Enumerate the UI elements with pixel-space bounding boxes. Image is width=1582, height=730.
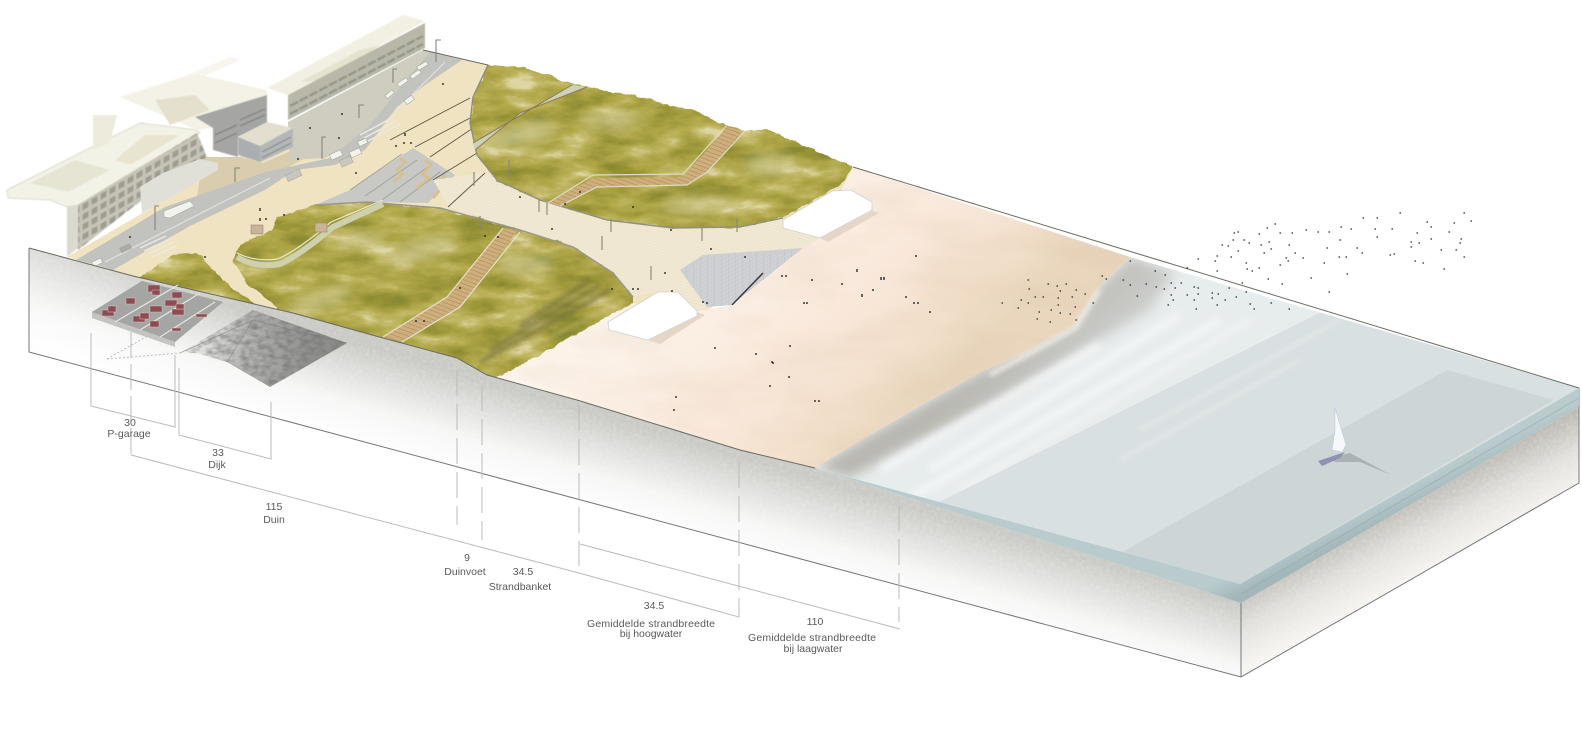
soil cross-section: right face — [1242, 408, 1578, 676]
shallow water — [913, 312, 1579, 584]
plaza black lines — [390, 98, 485, 207]
label: Dijk — [208, 447, 226, 471]
beach pavilion north — [783, 190, 879, 242]
label: low water beach width: bij laagwater — [784, 643, 843, 655]
label: Strandbanket — [489, 566, 551, 593]
flock of birds — [1002, 213, 1472, 322]
label: Duinvoet: Duinvoet — [444, 566, 486, 578]
dune: large south-west — [233, 202, 633, 378]
label: Dijk: 33 — [212, 447, 224, 459]
ground: north square — [288, 50, 440, 160]
label: low water beach width: 110 — [807, 616, 824, 628]
label: Duinvoet — [444, 552, 486, 578]
building: middle block — [120, 57, 267, 157]
label: Duin: Duin — [263, 514, 285, 526]
shoreline foam — [990, 290, 1099, 375]
ground surface: sand promenade — [67, 50, 853, 373]
water surface — [815, 257, 1579, 584]
label: high water beach width — [587, 600, 715, 640]
lamp posts — [155, 40, 737, 280]
label: high water beach width: 34.5 — [644, 600, 664, 612]
deep water — [1122, 370, 1554, 584]
dimension lines — [91, 332, 900, 629]
label: Duin: 115 — [266, 501, 283, 513]
building: long north block — [267, 15, 425, 120]
boardwalk: south-west dune — [383, 228, 520, 342]
low pavilion — [140, 159, 218, 213]
water slab edge — [815, 388, 1579, 603]
dune: small front — [133, 252, 270, 312]
building: south-west block — [7, 115, 207, 257]
label: P-garage: 30 — [124, 417, 136, 429]
crosswalks — [140, 118, 400, 257]
stepped terrace — [315, 148, 455, 205]
label: Strandbanket: Strandbanket — [489, 581, 551, 593]
stone tribune — [680, 248, 803, 307]
road — [76, 52, 462, 270]
plaza paving — [433, 173, 817, 311]
dune path curve — [237, 200, 383, 265]
sailboat — [1318, 408, 1391, 475]
cars and truck — [92, 61, 428, 267]
parking garage — [92, 281, 223, 347]
label: P-garage: P-garage — [107, 428, 151, 440]
beach pavilion south — [608, 292, 705, 344]
label: high water beach width: bij hoogwater — [620, 628, 683, 640]
label: P-garage — [107, 417, 151, 440]
south-west dune kerb — [315, 202, 633, 297]
wet sand band — [815, 257, 1175, 478]
water layer line — [1241, 398, 1579, 594]
dike cross-section — [180, 310, 347, 387]
label: Duinvoet: 9 — [464, 552, 470, 564]
north-east dune kerb — [470, 65, 783, 228]
label: Duin — [263, 501, 285, 526]
people on beach — [674, 255, 930, 411]
people on promenade — [130, 83, 745, 322]
label: low water beach width — [748, 616, 876, 655]
label: Dijk: Dijk — [208, 459, 226, 471]
dune: north-east — [470, 65, 853, 228]
label: Strandbanket: 34.5 — [513, 566, 533, 578]
block top edges — [29, 50, 1579, 468]
dark marram grass at dune foot — [480, 280, 625, 362]
foam streaks — [880, 316, 1217, 496]
label: high water beach width: Gemiddelde strandbreedte — [587, 618, 715, 630]
soil cross-section: front face — [30, 248, 1240, 670]
beach — [498, 168, 1130, 470]
dune mist patches — [285, 112, 796, 362]
building: small front block — [238, 122, 293, 162]
path: grey dune path — [473, 85, 587, 150]
label: low water beach width: Gemiddelde strandbreedte — [748, 632, 876, 644]
block outline — [29, 248, 1579, 677]
boardwalk: north-east dune — [548, 125, 745, 206]
huts — [251, 223, 327, 234]
sailboat shadow — [1330, 453, 1391, 475]
ground: tan forecourt — [197, 150, 320, 197]
